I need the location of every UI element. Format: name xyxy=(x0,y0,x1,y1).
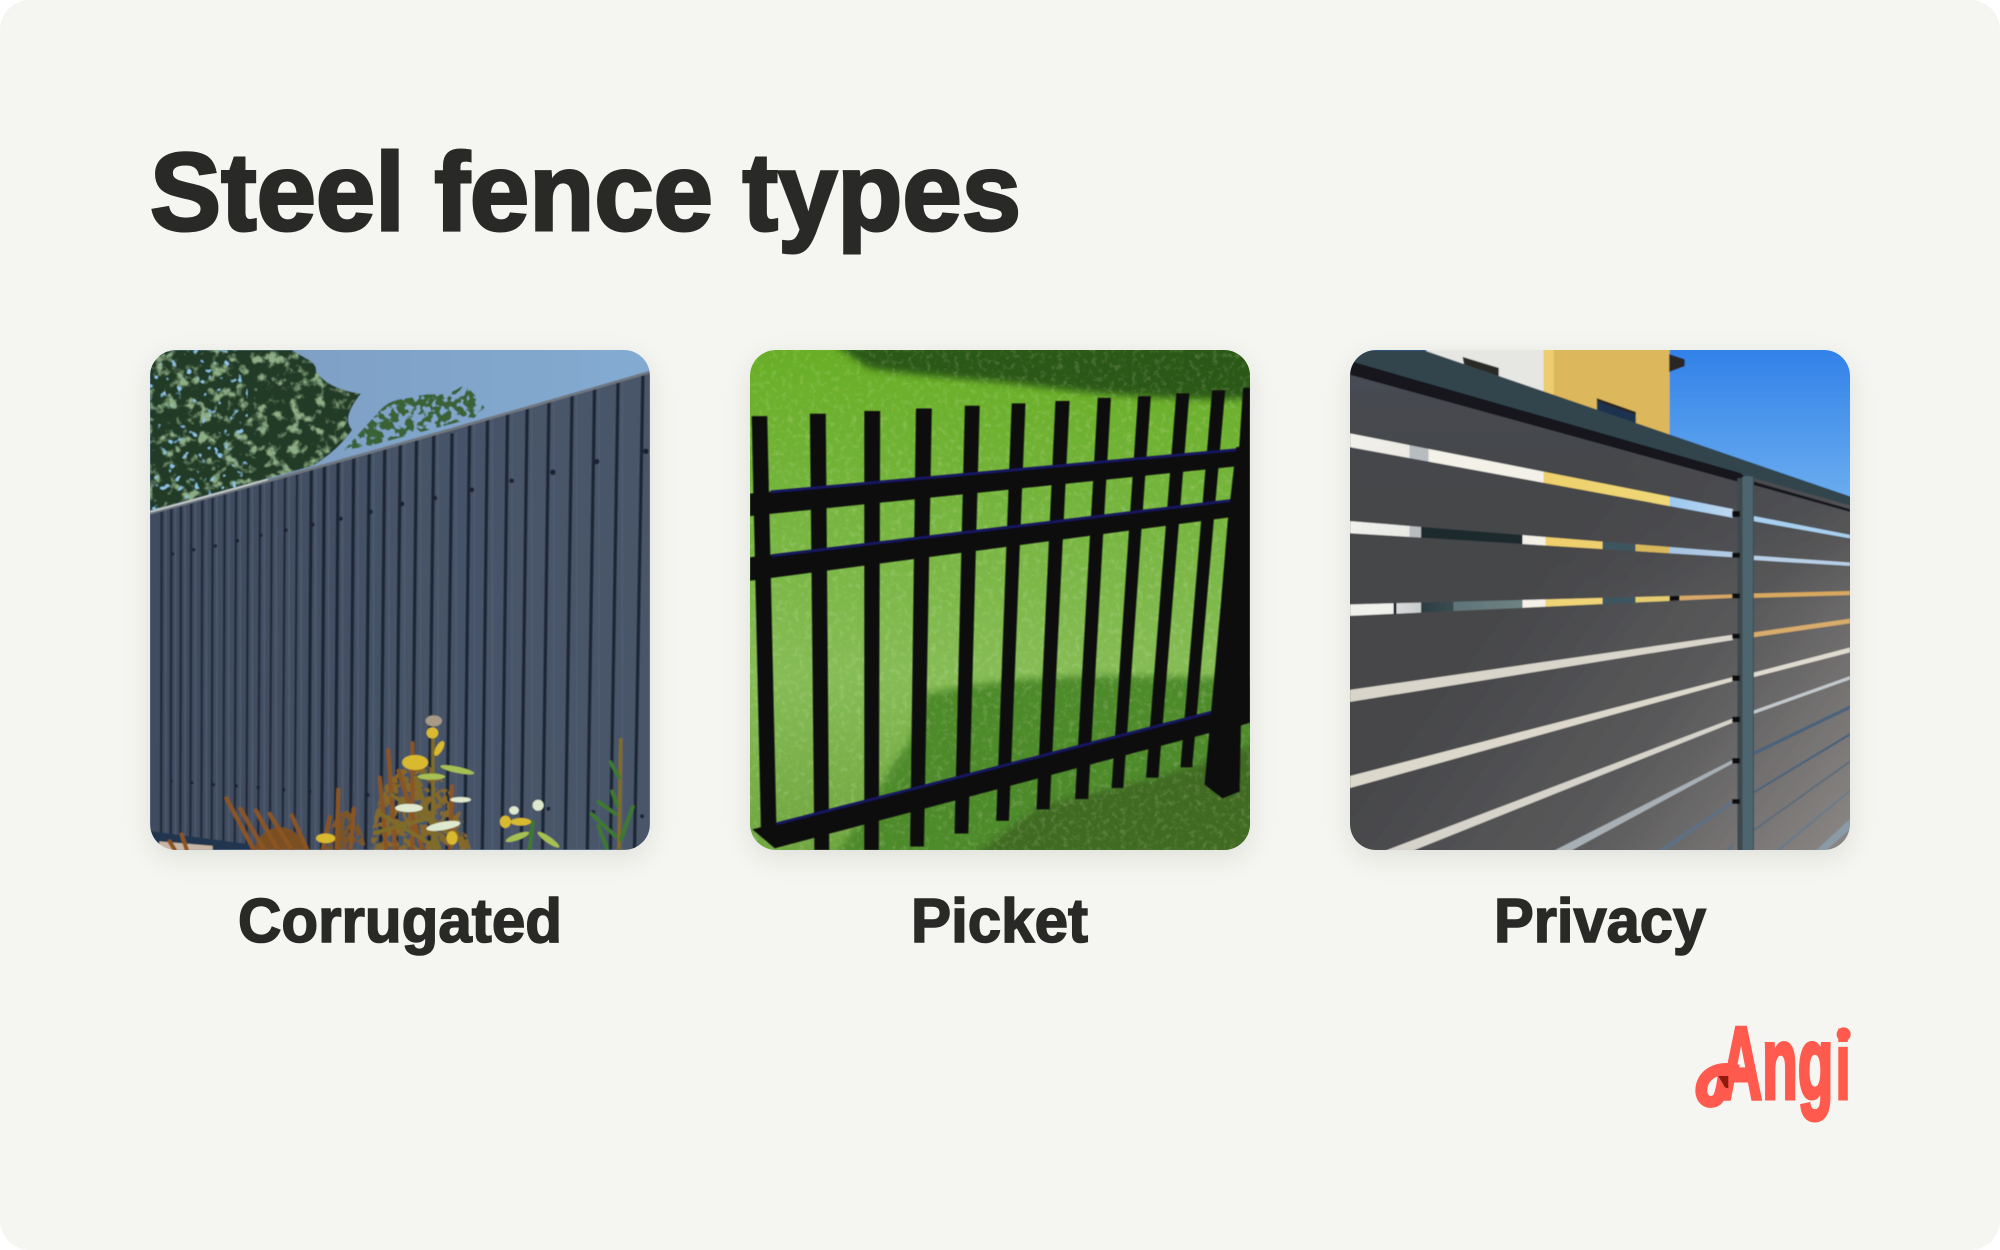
top cap xyxy=(1344,350,1857,507)
fence post xyxy=(1737,478,1754,853)
fence ribs xyxy=(165,450,474,849)
horizontal gaps xyxy=(1350,433,1733,518)
label: corrugated: Corrugated xyxy=(238,887,562,956)
sky and building xyxy=(1344,344,1857,550)
post brackets xyxy=(1732,511,1740,804)
tree xyxy=(144,344,485,523)
photo: privacy steel fence xyxy=(1350,350,1850,850)
fence pickets xyxy=(752,388,1250,850)
logo: Angi: Angi xyxy=(1720,1005,1850,1120)
photo: picket steel fence xyxy=(750,350,1250,850)
label: picket: Picket xyxy=(911,887,1088,956)
title: Steel fence types xyxy=(150,131,1021,254)
photo: corrugated steel fence xyxy=(150,350,650,850)
fence cap xyxy=(150,372,650,513)
rivets xyxy=(170,448,649,818)
fence post xyxy=(1205,445,1250,798)
plants xyxy=(371,762,471,850)
label: privacy: Privacy xyxy=(1494,887,1706,956)
ground xyxy=(150,831,254,850)
fence panels xyxy=(1344,368,1857,857)
fence rails xyxy=(750,449,1240,848)
lawn shadows xyxy=(833,344,1257,857)
